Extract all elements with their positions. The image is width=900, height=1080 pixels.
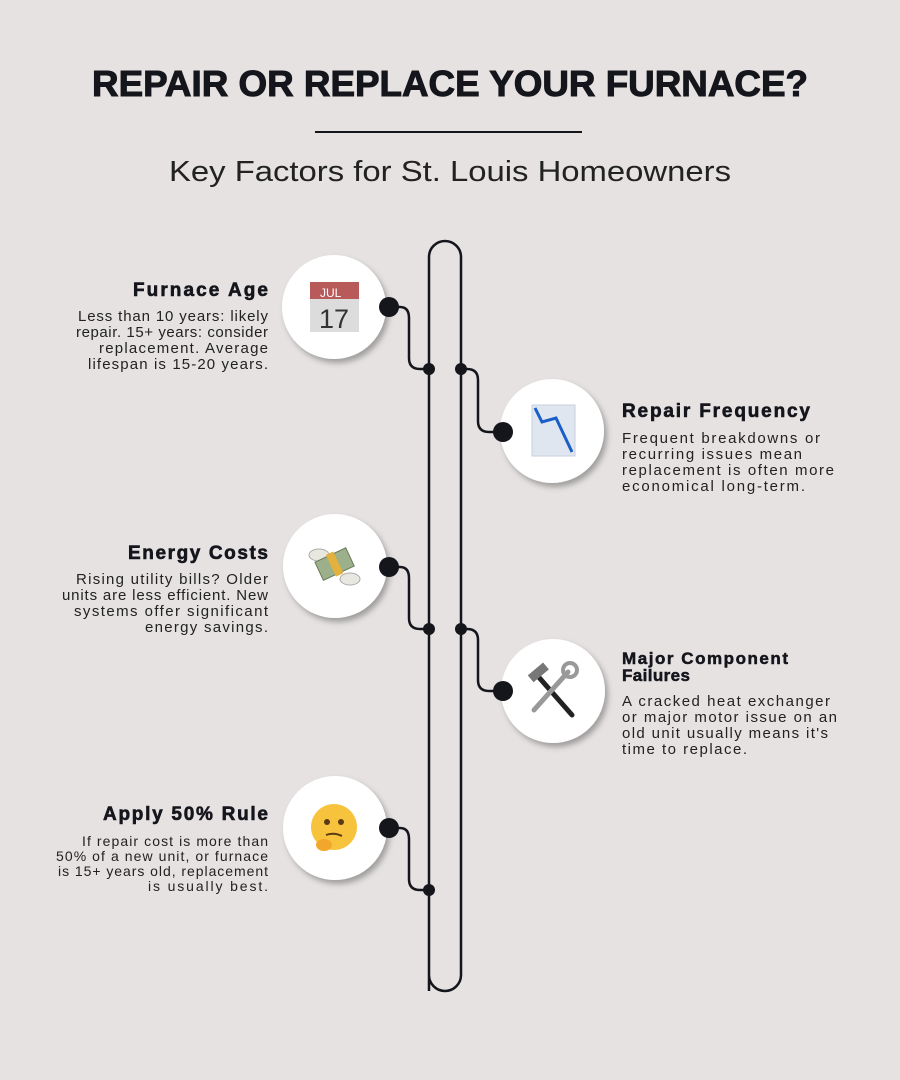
- circle: repair frequency: [493, 379, 604, 483]
- text: furnace age: repair. 15+ years: consider: [76, 324, 268, 341]
- text: major component failures: [622, 649, 837, 758]
- text: repair frequency: recurring issues mean: [622, 446, 802, 463]
- icon: hammer and wrench: [528, 663, 577, 715]
- connectors: [389, 307, 503, 890]
- text: repair frequency: [622, 401, 834, 495]
- text: energy costs: Energy Costs: [128, 543, 268, 564]
- timeline tube: [429, 241, 461, 991]
- text: 50% rule: If repair cost is more than: [82, 833, 268, 849]
- text: energy costs: [62, 543, 269, 636]
- title: REPAIR OR REPLACE YOUR FURNACE?: [92, 63, 808, 104]
- text: energy costs: energy savings.: [145, 619, 268, 636]
- circle: energy costs: [283, 514, 399, 618]
- text: repair frequency: economical long-term.: [622, 478, 805, 495]
- text: energy costs: units are less efficient. New: [62, 587, 268, 604]
- text: major component failures: Failures: [622, 666, 690, 685]
- text: major component failures: A cracked heat exchanger: [622, 693, 830, 710]
- text: 50% rule: is usually best.: [148, 878, 268, 894]
- circle: major components: [493, 639, 605, 743]
- subtitle: Key Factors for St. Louis Homeowners: [169, 156, 731, 188]
- circle: 50% rule: [283, 776, 399, 880]
- circle: furnace age: [282, 255, 399, 359]
- icon: calendar: 17: [319, 304, 349, 334]
- text: furnace age: replacement. Average: [99, 340, 268, 357]
- text: major component failures: Major Component: [622, 649, 788, 668]
- icon: chart down: [532, 405, 575, 456]
- text: furnace age: Less than 10 years: likely: [78, 308, 268, 325]
- text: repair frequency: Frequent breakdowns or: [622, 430, 820, 447]
- text: major component failures: time to replace.: [622, 741, 747, 758]
- text: major component failures: or major motor issue on an: [622, 709, 837, 726]
- text: 50% rule: [56, 804, 268, 894]
- text: 50% rule: Apply 50% Rule: [103, 804, 268, 825]
- text: repair frequency: Repair Frequency: [622, 401, 810, 422]
- icon: money with wings: [309, 548, 360, 585]
- icon: calendar: [310, 282, 359, 334]
- text: repair frequency: replacement is often more: [622, 462, 834, 479]
- text: major component failures: old unit usually means it's: [622, 725, 828, 742]
- icon: calendar: JUL: [320, 286, 342, 300]
- text: energy costs: Rising utility bills? Older: [76, 571, 268, 588]
- text: energy costs: systems offer significant: [74, 603, 269, 620]
- text: furnace age: lifespan is 15-20 years.: [88, 356, 268, 373]
- text: 50% rule: 50% of a new unit, or furnace: [56, 848, 268, 864]
- text: furnace age: Furnace Age: [133, 280, 268, 301]
- text: furnace age: [76, 280, 268, 373]
- icon: thinking face: [311, 804, 357, 851]
- text: 50% rule: is 15+ years old, replacement: [58, 863, 268, 879]
